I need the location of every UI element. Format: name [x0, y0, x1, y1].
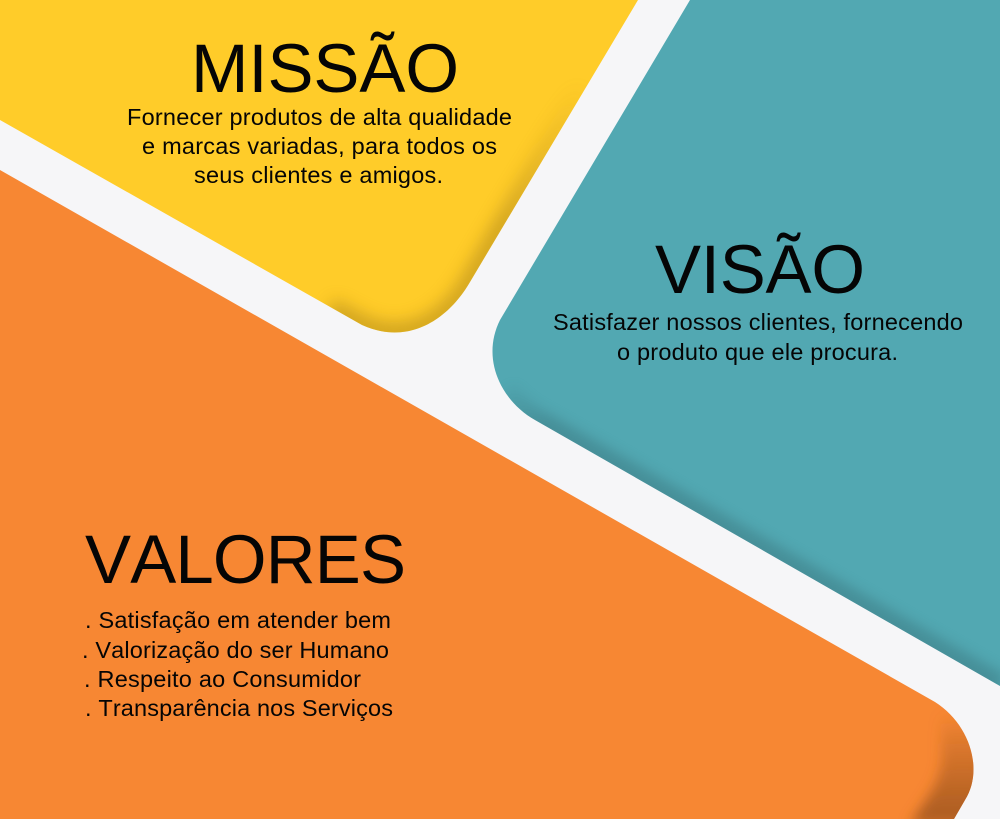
panel: missão: [0, 0, 638, 332]
list: valores items: . Transparência nos Serviços: [85, 695, 393, 721]
list: valores items: . Respeito ao Consumidor: [84, 666, 361, 692]
list: valores items: [82, 607, 393, 721]
heading: valores: VALORES: [85, 521, 406, 598]
heading: missão: MISSÃO: [191, 30, 459, 107]
heading: visão: VISÃO: [655, 231, 865, 308]
text: visão description: [553, 309, 963, 365]
text: visão description: o produto que ele procura.: [617, 339, 898, 365]
text: missão description: Fornecer produtos de alta qualidade: [127, 104, 512, 130]
text: missão description: [127, 104, 512, 188]
list: valores items: . Valorização do ser Humano: [82, 637, 389, 663]
text: visão description: Satisfazer nossos clientes, fornecendo: [553, 309, 963, 335]
text: missão description: seus clientes e amigos.: [194, 162, 443, 188]
list: valores items: . Satisfação em atender bem: [85, 607, 391, 633]
panel: visão: [492, 0, 1000, 686]
text: missão description: e marcas variadas, para todos os: [142, 133, 497, 159]
panel: valores: [0, 170, 985, 819]
